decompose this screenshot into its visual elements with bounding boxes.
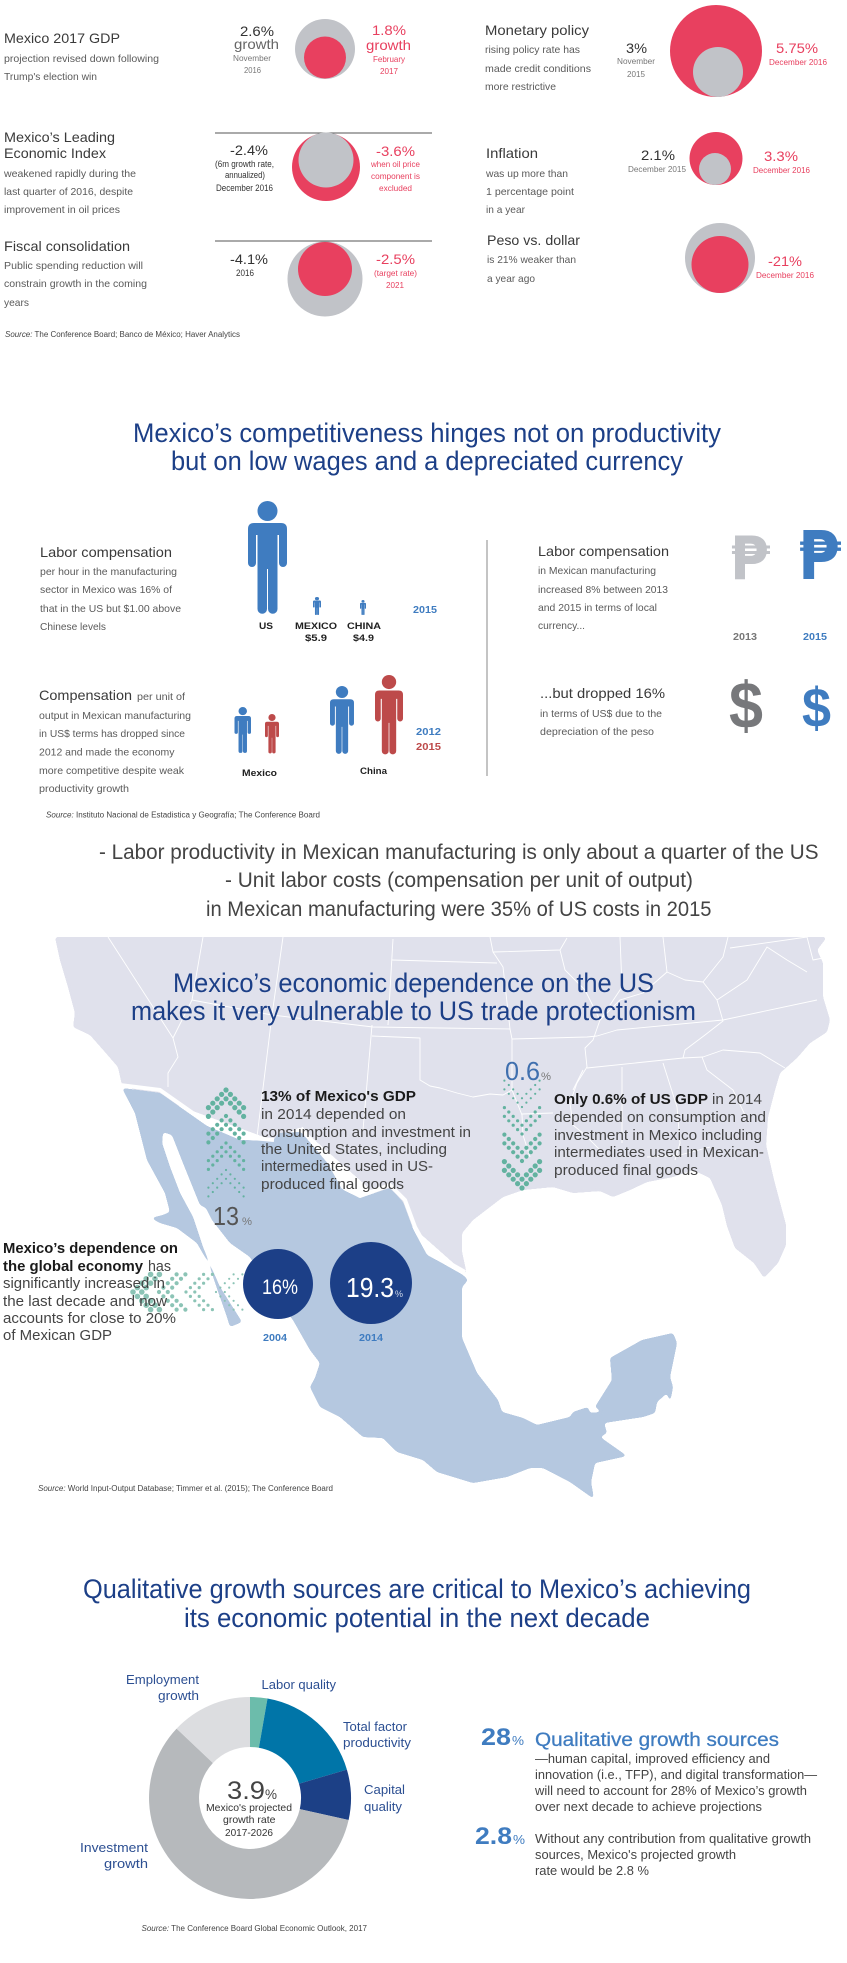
icon: Mexico person — [313, 597, 321, 615]
stat: 19.3 percent 2014: 19.3 — [346, 1272, 394, 1303]
text: productivity statements: - Labor productivity in Mexican manufacturing is only about a quarter of the US — [99, 841, 818, 864]
text: compensation per unit: output in Mexican manufacturing — [39, 710, 191, 722]
chart: inflation circles: December 2015 — [628, 164, 686, 174]
chart: inflation circles — [628, 132, 810, 185]
text: global economy dependence: of Mexican GDP — [3, 1328, 112, 1344]
block: inflation text: Inflation — [486, 145, 538, 161]
icon: left arrow dots — [133, 1274, 242, 1310]
segment: total factor productivity — [259, 1698, 347, 1784]
chart: inflation circles: 3.3% — [764, 148, 798, 164]
source note: Source: The Conference Board Global Economic Outlook, 2017 — [142, 1924, 368, 1933]
icon: peso 2015: 2015 — [803, 632, 827, 643]
icon: peso 2015 — [798, 517, 841, 643]
icon: up arrow dots — [208, 1090, 244, 1196]
icon: China 2012 person — [330, 686, 354, 754]
text: labor compensation local currency: and 2015 in terms of local — [538, 602, 657, 614]
icon: peso 2013: ₱ — [730, 524, 770, 594]
chart: hourly compensation people: CHINA — [347, 621, 381, 632]
stat: 19.3 percent 2014: % — [395, 1289, 403, 1299]
map: US state lines — [108, 937, 823, 1160]
chart: fiscal circles — [215, 240, 432, 316]
block: monetary policy text: more restrictive — [485, 81, 556, 93]
chart: leading index circles: component is — [371, 171, 420, 181]
block: peso text: Peso vs. dollar — [487, 232, 580, 248]
callout: 2.8 percent without qualitative sources: rate would be 2.8 % — [535, 1864, 649, 1878]
block: inflation text — [485, 145, 574, 216]
text: compensation per unit: more competitive despite weak — [39, 765, 185, 777]
text: productivity statements — [99, 841, 818, 921]
callout: 28 percent qualitative sources: Qualitative growth sources — [535, 1730, 779, 1751]
icon: Mexico 2015 person — [265, 714, 279, 753]
chart: fiscal circles: 2021 — [386, 280, 404, 290]
block: peso text — [487, 232, 580, 285]
chart: leading index circles: December 2016 — [216, 183, 273, 193]
panel: competitiveness — [39, 418, 841, 921]
text: labor compensation per hour: per hour in the manufacturing — [40, 566, 177, 578]
chart: policy rate circles: November — [617, 56, 655, 66]
icon: Mexico 2012 person — [234, 707, 251, 753]
text: compensation per unit: Compensation — [39, 687, 132, 703]
block: leading index text: Economic Index — [4, 145, 106, 161]
text: 0.6 percent of US GDP: in 2014 — [712, 1092, 762, 1108]
text: global economy dependence: the last decade and now — [3, 1294, 168, 1310]
chart: hourly compensation people: US — [259, 621, 273, 632]
block: peso text: is 21% weaker than — [487, 254, 576, 266]
chart: leading index circles: (6m growth rate, — [215, 159, 274, 169]
text: 13 percent of Mexico GDP: in 2014 depended on — [261, 1107, 406, 1123]
text: 13 percent of Mexico GDP: 13% of Mexico's GDP — [261, 1089, 416, 1105]
text: labor compensation local currency: increased 8% between 2013 — [538, 584, 668, 596]
block: inflation text: was up more than — [485, 168, 568, 180]
chart: fiscal circles: (target rate) — [374, 268, 417, 278]
text: compensation per unit — [39, 687, 191, 795]
heading: makes it very vulnerable to US trade protectionism — [131, 996, 696, 1026]
text: 13 percent of Mexico GDP: produced final goods — [261, 1177, 404, 1193]
chart: fiscal circles: -2.5% — [376, 251, 415, 267]
heading: but on low wages and a depreciated currency — [171, 446, 683, 476]
block: inflation text: in a year — [486, 204, 525, 216]
donut centre text: 2017-2026 — [225, 1827, 273, 1839]
text: global economy dependence — [3, 1241, 178, 1344]
block: fiscal consolidation text: Public spending reduction will — [4, 260, 143, 272]
text: 13 percent of Mexico GDP: consumption and investment in — [261, 1125, 471, 1141]
block: leading index text: last quarter of 2016, despite — [4, 186, 133, 198]
callout: 2.8 percent without qualitative sources: 2.8 — [475, 1823, 512, 1850]
chart: GDP circles: growth — [234, 36, 279, 52]
block: inflation text: 1 percentage point — [486, 186, 574, 198]
chart: GDP circles: February — [373, 54, 406, 64]
labels: donut segments: Investment — [80, 1841, 149, 1855]
stat: 19.3 percent 2014 — [330, 1242, 412, 1344]
block: fiscal consolidation text: Fiscal consolidation — [4, 238, 130, 254]
segment: capital quality — [299, 1770, 351, 1820]
heading — [133, 418, 721, 476]
text: dropped in US dollars — [540, 685, 665, 738]
stat: 16 percent 2004: 16% — [262, 1276, 298, 1299]
callout: 28 percent qualitative sources: will need to account for 28% of Mexico’s growth — [534, 1784, 807, 1798]
chart: GDP circles: 2.6% — [240, 23, 274, 39]
text: global economy dependence: the global economy — [3, 1259, 143, 1275]
block: fiscal consolidation text: years — [4, 297, 29, 309]
text: labor compensation local currency: currency... — [538, 620, 585, 632]
block: GDP projection text: Trump's election win — [4, 71, 97, 83]
labels: donut segments: productivity — [343, 1736, 412, 1750]
panel: economic indicators — [3, 5, 827, 339]
chart: peso circles — [685, 223, 814, 293]
text: 0.6 percent of US GDP: intermediates used in Mexican- — [554, 1145, 764, 1161]
text: productivity statements: - Unit labor costs (compensation per unit of output) — [225, 869, 693, 892]
text: 0.6 percent of US GDP: Only 0.6% of US GDP — [554, 1092, 708, 1108]
chart: leading index circles: excluded — [379, 183, 412, 193]
chart: hourly compensation people: $5.9 — [305, 633, 327, 644]
labels: donut segments: Labor quality — [262, 1678, 337, 1692]
callout: 28 percent qualitative sources — [481, 1724, 818, 1814]
map: United States — [55, 937, 830, 1278]
block: monetary policy text: made credit conditions — [485, 63, 591, 75]
source note: Source: The Conference Board; Banco de México; Haver Analytics — [5, 330, 240, 339]
heading — [83, 1574, 751, 1633]
chart: policy rate circles — [617, 5, 827, 97]
block: monetary policy text: Monetary policy — [485, 22, 589, 38]
text: global economy dependence: significantly increased in — [3, 1276, 165, 1292]
text: 0.6 percent of US GDP: investment in Mexico including — [554, 1128, 762, 1144]
panel: qualitative growth — [80, 1574, 818, 1933]
text: labor compensation per hour: sector in Mexico was 16% of — [40, 584, 172, 596]
labels: donut segments: Capital — [364, 1783, 405, 1797]
icon: peso 2015: ₱ — [798, 517, 841, 595]
donut centre text: 3.9 — [227, 1777, 265, 1805]
stat: 0.6 percent: 0.6 — [505, 1056, 540, 1086]
chart: peso circles: December 2016 — [756, 270, 814, 280]
chart: leading index circles — [215, 132, 432, 201]
labels: donut segments: growth — [158, 1689, 199, 1703]
heading: its economic potential in the next decade — [184, 1603, 650, 1633]
callout: 28 percent qualitative sources: —human capital, improved efficiency and — [535, 1752, 770, 1766]
chart: inflation circles: December 2016 — [753, 165, 810, 175]
text: labor compensation local currency — [538, 543, 669, 632]
icon: US person — [248, 501, 287, 614]
chart: GDP circles: 2017 — [380, 66, 398, 76]
block: leading index text: weakened rapidly during the — [3, 168, 136, 180]
panel: map of US and Mexico — [3, 937, 830, 1499]
chart: unit compensation people: 2015 — [416, 742, 441, 753]
text: dropped in US dollars: depreciation of the peso — [540, 726, 654, 738]
text: labor compensation per hour: that in the US but $1.00 above — [40, 603, 181, 615]
donut centre text: % — [265, 1786, 277, 1802]
text: 13 percent of Mexico GDP: intermediates used in US- — [261, 1159, 433, 1175]
block: fiscal consolidation text: constrain growth in the coming — [4, 278, 147, 290]
callout: 28 percent qualitative sources: over next decade to achieve projections — [535, 1800, 762, 1814]
chart: leading index circles: annualized) — [225, 170, 265, 180]
text: dropped in US dollars: ...but dropped 16% — [540, 685, 665, 701]
text: labor compensation per hour — [40, 544, 181, 633]
chart: GDP circles — [233, 19, 411, 79]
segment: employment growth — [177, 1697, 250, 1763]
block: monetary policy text — [485, 22, 591, 93]
text: global economy dependence: Mexico’s dependence on — [3, 1241, 178, 1257]
chart: policy rate circles: December 2016 — [769, 57, 827, 67]
segment: labor quality — [250, 1697, 268, 1748]
stat: 16 percent 2004: 2004 — [263, 1333, 287, 1344]
chart: unit compensation people: 2012 — [416, 727, 441, 738]
chart: fiscal circles: 2016 — [236, 268, 254, 278]
labels: donut segments: Total factor — [343, 1720, 407, 1734]
chart: peso circles: -21% — [768, 253, 802, 269]
chart: hourly compensation people: MEXICO — [295, 621, 337, 632]
chart: GDP circles: growth — [366, 37, 411, 53]
chart: policy rate circles: 2015 — [627, 69, 645, 79]
block: leading index text: improvement in oil prices — [4, 204, 120, 216]
icon: dollar blue: $ — [802, 676, 831, 739]
callout: 28 percent qualitative sources: 28 — [481, 1724, 511, 1751]
icon: peso 2013 — [730, 524, 770, 643]
text: compensation per unit: in US$ terms has dropped since — [39, 728, 185, 740]
text: productivity statements: in Mexican manufacturing were 35% of US costs in 2015 — [206, 898, 712, 921]
stat: 0.6 percent: % — [541, 1071, 551, 1083]
block: peso text: a year ago — [487, 273, 535, 285]
icon: peso 2013: 2013 — [733, 632, 757, 643]
chart: leading index circles: -2.4% — [230, 142, 268, 158]
block: GDP projection text: projection revised down following — [4, 53, 159, 65]
text: global economy dependence: has — [148, 1259, 171, 1275]
text: compensation per unit: productivity growth — [39, 783, 129, 795]
text: global economy dependence: accounts for close to 20% — [3, 1311, 176, 1327]
chart: hourly compensation people: $4.9 — [353, 633, 374, 644]
stat: 13 percent: 13 — [213, 1201, 239, 1231]
labels: donut segments: growth — [104, 1857, 148, 1871]
callout: 28 percent qualitative sources: % — [512, 1733, 524, 1748]
source note: Source: World Input-Output Database; Timmer et al. (2015); The Conference Board — [38, 1484, 333, 1493]
labels: donut segments: quality — [364, 1800, 403, 1814]
icon: dollar gray: $ — [729, 668, 763, 742]
block: fiscal consolidation text — [4, 238, 147, 309]
text: 13 percent of Mexico GDP: the United States, including — [261, 1142, 447, 1158]
icon: down arrow dots — [504, 1081, 540, 1188]
text: compensation per unit: 2012 and made the economy — [39, 746, 175, 758]
chart: hourly compensation people — [248, 501, 437, 644]
block: GDP projection text: Mexico 2017 GDP — [4, 30, 120, 46]
heading: Mexico’s competitiveness hinges not on productivity — [133, 418, 721, 448]
text: 0.6 percent of US GDP — [554, 1092, 766, 1179]
icon: China 2015 person — [375, 675, 403, 754]
heading — [131, 968, 696, 1026]
callout: 2.8 percent without qualitative sources: % — [513, 1832, 525, 1847]
chart: policy rate circles: 5.75% — [776, 40, 818, 56]
labels: donut segments: Employment — [126, 1673, 200, 1687]
chart: hourly compensation people: 2015 — [413, 605, 437, 616]
chart: GDP circles: November — [233, 53, 271, 63]
callout: 28 percent qualitative sources: innovation (i.e., TFP), and digital transformation— — [535, 1768, 818, 1782]
chart: unit compensation people: Mexico — [242, 768, 277, 779]
chart: GDP circles: 1.8% — [372, 22, 406, 38]
stat: 16 percent 2004 — [243, 1249, 313, 1344]
chart: GDP circles: 2016 — [244, 65, 261, 75]
text: labor compensation per hour: Labor compensation — [40, 544, 172, 560]
chart: inflation circles: 2.1% — [641, 147, 675, 163]
text: compensation per unit: per unit of — [137, 691, 185, 703]
text: dropped in US dollars: in terms of US$ due to the — [540, 708, 662, 720]
donut centre text — [206, 1777, 292, 1839]
chart: fiscal circles: -4.1% — [230, 251, 268, 267]
chart: donut of growth sources — [149, 1697, 351, 1899]
text: 0.6 percent of US GDP: depended on consumption and — [554, 1110, 766, 1126]
donut centre text: growth rate — [223, 1814, 276, 1826]
block: monetary policy text: rising policy rate has — [485, 44, 580, 56]
text: labor compensation local currency: Labor compensation — [538, 543, 669, 559]
callout: 2.8 percent without qualitative sources: Without any contribution from qualitative growth — [535, 1832, 811, 1846]
labels: donut segments — [80, 1673, 412, 1871]
icon: China person — [360, 600, 366, 615]
donut centre text: Mexico's projected — [206, 1802, 292, 1814]
chart: policy rate circles: 3% — [626, 40, 647, 56]
chart: leading index circles: when oil price — [370, 159, 420, 169]
map: Mexico — [122, 1088, 677, 1499]
chart: unit compensation people — [234, 675, 441, 779]
callout: 2.8 percent without qualitative sources — [475, 1823, 811, 1878]
chart: leading index circles: -3.6% — [376, 143, 415, 159]
stat: 13 percent: % — [242, 1216, 252, 1228]
text: 13 percent of Mexico GDP — [261, 1089, 471, 1193]
block: leading index text — [3, 129, 136, 216]
text: labor compensation local currency: in Mexican manufacturing — [538, 565, 656, 577]
segment: investment growth — [149, 1729, 349, 1899]
heading: Qualitative growth sources are critical to Mexico’s achieving — [83, 1574, 751, 1604]
heading: Mexico’s economic dependence on the US — [173, 968, 654, 998]
text: 0.6 percent of US GDP: produced final goods — [554, 1163, 698, 1179]
source note: Source: Instituto Nacional de Estadistica y Geografía; The Conference Board — [46, 810, 320, 820]
chart: unit compensation people: China — [360, 766, 388, 777]
block: leading index text: Mexico’s Leading — [4, 129, 115, 145]
stat: 19.3 percent 2014: 2014 — [359, 1333, 383, 1344]
callout: 2.8 percent without qualitative sources: sources, Mexico's projected growth — [535, 1848, 736, 1862]
text: labor compensation per hour: Chinese levels — [40, 621, 106, 633]
block: GDP projection text — [4, 30, 159, 83]
